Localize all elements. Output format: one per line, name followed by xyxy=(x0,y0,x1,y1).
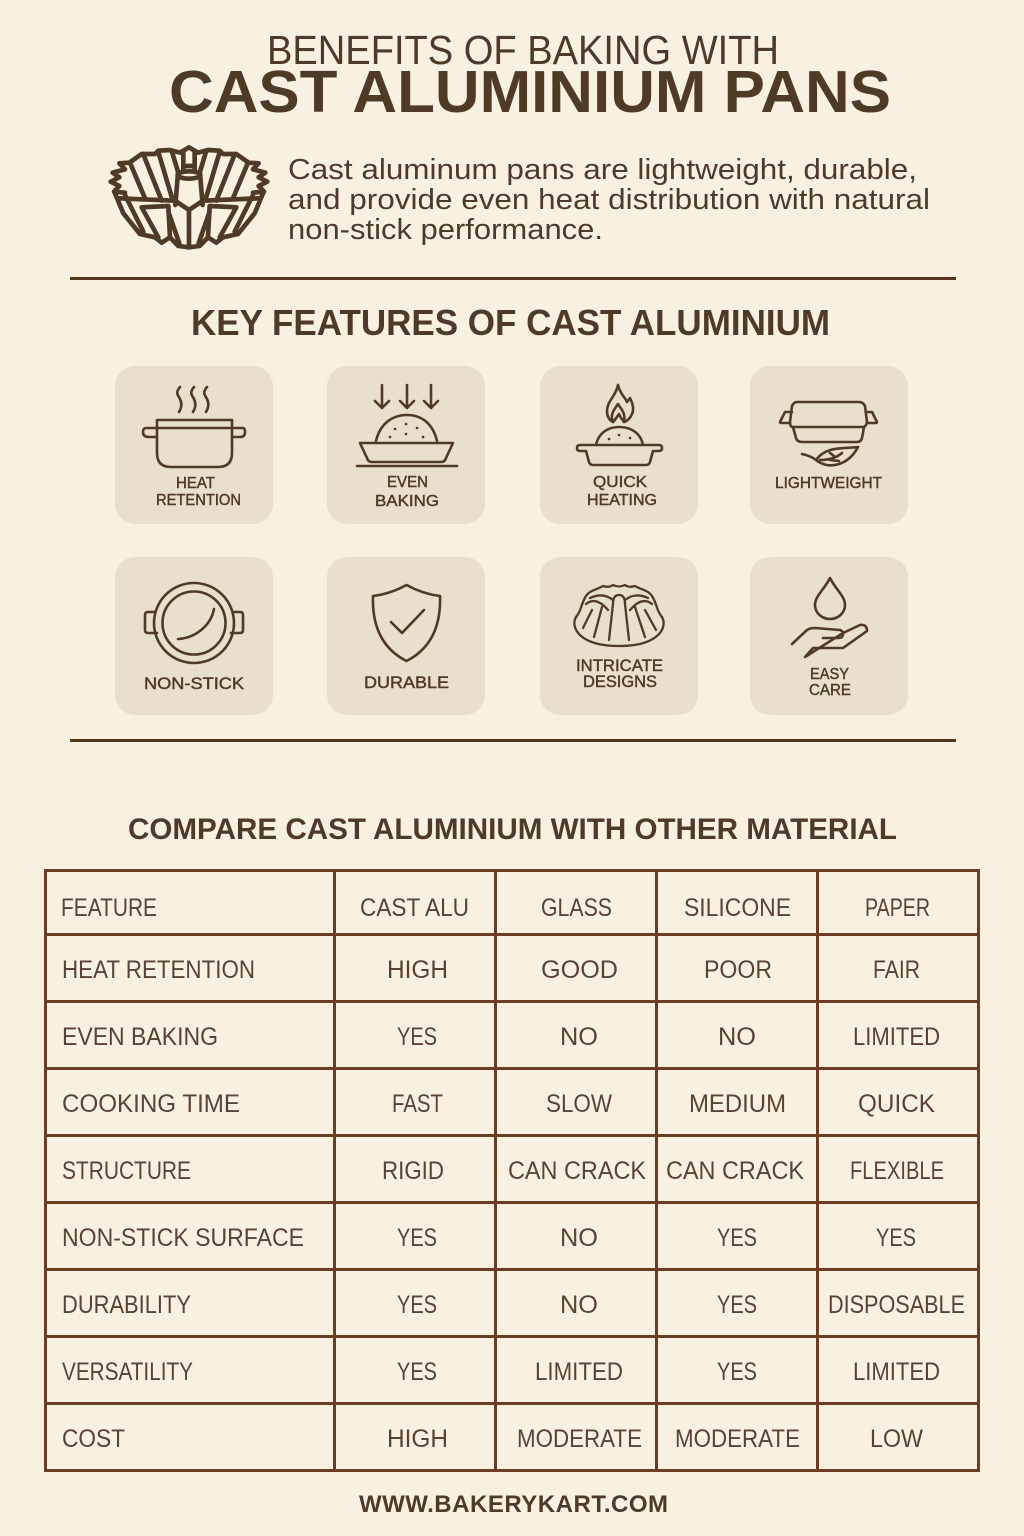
intro text: non-stick performance. xyxy=(288,214,603,246)
panel: heat retention xyxy=(115,366,273,524)
row: cost: MODERATE xyxy=(517,1425,642,1453)
panel: non-stick xyxy=(115,557,273,715)
panel: durable xyxy=(327,557,485,715)
label: CARE xyxy=(809,682,851,699)
icon: even baking loaf with arrows xyxy=(357,385,457,466)
row: structure: CAN CRACK xyxy=(508,1157,646,1185)
row: durability: DISPOSABLE xyxy=(828,1291,965,1319)
row: header: SILICONE xyxy=(684,894,791,922)
row: heat retention: HIGH xyxy=(387,956,448,984)
row: header: CAST ALU xyxy=(360,894,469,922)
label xyxy=(587,474,657,509)
row: durability: DURABILITY xyxy=(62,1291,191,1319)
row: non-stick surface xyxy=(62,1224,916,1252)
label: QUICK xyxy=(593,474,647,491)
label: HEATING xyxy=(587,492,657,509)
label xyxy=(375,474,439,510)
row: structure: FLEXIBLE xyxy=(850,1157,944,1185)
row: non-stick surface: YES xyxy=(397,1224,437,1252)
row: versatility: LIMITED xyxy=(853,1358,940,1386)
row: even baking: NO xyxy=(718,1023,756,1051)
row: non-stick surface: NON-STICK SURFACE xyxy=(62,1224,304,1252)
row: even baking: EVEN BAKING xyxy=(62,1023,218,1051)
row: heat retention: FAIR xyxy=(873,956,920,984)
icon: dish with leaf xyxy=(780,402,877,465)
panel: lightweight xyxy=(750,366,908,524)
row: cost xyxy=(62,1425,923,1453)
row: header: PAPER xyxy=(865,894,930,922)
icon: shield with check xyxy=(373,585,440,661)
label: EASY xyxy=(810,666,849,683)
intro text: and provide even heat distribution with natural xyxy=(288,184,930,216)
label: BAKING xyxy=(375,493,439,510)
title: BENEFITS OF BAKING WITH xyxy=(267,27,779,73)
label: NON-STICK xyxy=(144,674,245,693)
row: structure: CAN CRACK xyxy=(666,1157,804,1185)
row: heat retention: POOR xyxy=(704,956,772,984)
row: even baking: LIMITED xyxy=(853,1023,940,1051)
label xyxy=(809,666,851,699)
row: non-stick surface: NO xyxy=(560,1224,598,1252)
row: cooking time: FAST xyxy=(392,1090,443,1118)
icon: water drop over hand xyxy=(792,578,867,657)
label: RETENTION xyxy=(156,492,241,509)
icon: bundt pan xyxy=(111,147,267,247)
row: structure xyxy=(62,1157,944,1185)
row: versatility: VERSATILITY xyxy=(62,1358,193,1386)
footer url: WWW.BAKERYKART.COM xyxy=(359,1491,668,1518)
row: heat retention: GOOD xyxy=(541,956,618,984)
row: structure: RIGID xyxy=(382,1157,444,1185)
row: durability: YES xyxy=(397,1291,437,1319)
row: durability xyxy=(62,1291,965,1319)
title: CAST ALUMINIUM PANS xyxy=(169,59,891,125)
row: cost: HIGH xyxy=(387,1425,448,1453)
row: header: FEATURE xyxy=(61,894,157,922)
row: durability: YES xyxy=(717,1291,757,1319)
row: versatility: YES xyxy=(717,1358,757,1386)
row: cost: LOW xyxy=(870,1425,923,1453)
icon: round pan xyxy=(145,583,243,663)
panel: even baking xyxy=(327,366,485,524)
panel: intricate designs xyxy=(540,557,698,715)
label xyxy=(156,475,241,509)
row: durability: NO xyxy=(560,1291,598,1319)
row: versatility xyxy=(62,1358,940,1386)
row: versatility: LIMITED xyxy=(535,1358,623,1386)
row: versatility: YES xyxy=(397,1358,437,1386)
row: cooking time: QUICK xyxy=(858,1090,935,1118)
icon: flame over pan xyxy=(577,385,662,465)
row: header: GLASS xyxy=(541,894,612,922)
row: non-stick surface: YES xyxy=(717,1224,757,1252)
heading: key features: KEY FEATURES OF CAST ALUMINIUM xyxy=(191,302,830,343)
row: cooking time: SLOW xyxy=(546,1090,612,1118)
row: even baking: NO xyxy=(560,1023,598,1051)
row: heat retention: HEAT RETENTION xyxy=(62,956,255,984)
label: DESIGNS xyxy=(583,672,657,691)
icon: bundt cake xyxy=(574,585,664,646)
row: cooking time xyxy=(62,1090,935,1118)
row: heat retention xyxy=(62,956,920,984)
row: cost: MODERATE xyxy=(675,1425,800,1453)
panel: quick heating xyxy=(540,366,698,524)
title xyxy=(169,27,891,125)
icon: pot with steam xyxy=(143,387,245,467)
label: EVEN xyxy=(387,474,428,491)
row: cost: COST xyxy=(62,1425,125,1453)
row: even baking xyxy=(62,1023,940,1051)
row: cooking time: MEDIUM xyxy=(689,1090,786,1118)
comparison table xyxy=(45,870,978,1470)
intro text: Cast aluminum pans are lightweight, durable, xyxy=(288,154,917,186)
row: header xyxy=(61,894,930,922)
row: cooking time: COOKING TIME xyxy=(62,1090,240,1118)
label: HEAT xyxy=(176,475,215,492)
label: INTRICATE xyxy=(576,656,663,675)
intro text xyxy=(288,154,930,246)
row: structure: STRUCTURE xyxy=(62,1157,191,1185)
panel: easy care xyxy=(750,557,908,715)
row: even baking: YES xyxy=(397,1023,437,1051)
label: DURABLE xyxy=(364,673,449,692)
label: LIGHTWEIGHT xyxy=(775,475,882,492)
label xyxy=(576,656,663,691)
heading: compare: COMPARE CAST ALUMINIUM WITH OTHER MATERIAL xyxy=(128,813,897,846)
row: non-stick surface: YES xyxy=(876,1224,916,1252)
